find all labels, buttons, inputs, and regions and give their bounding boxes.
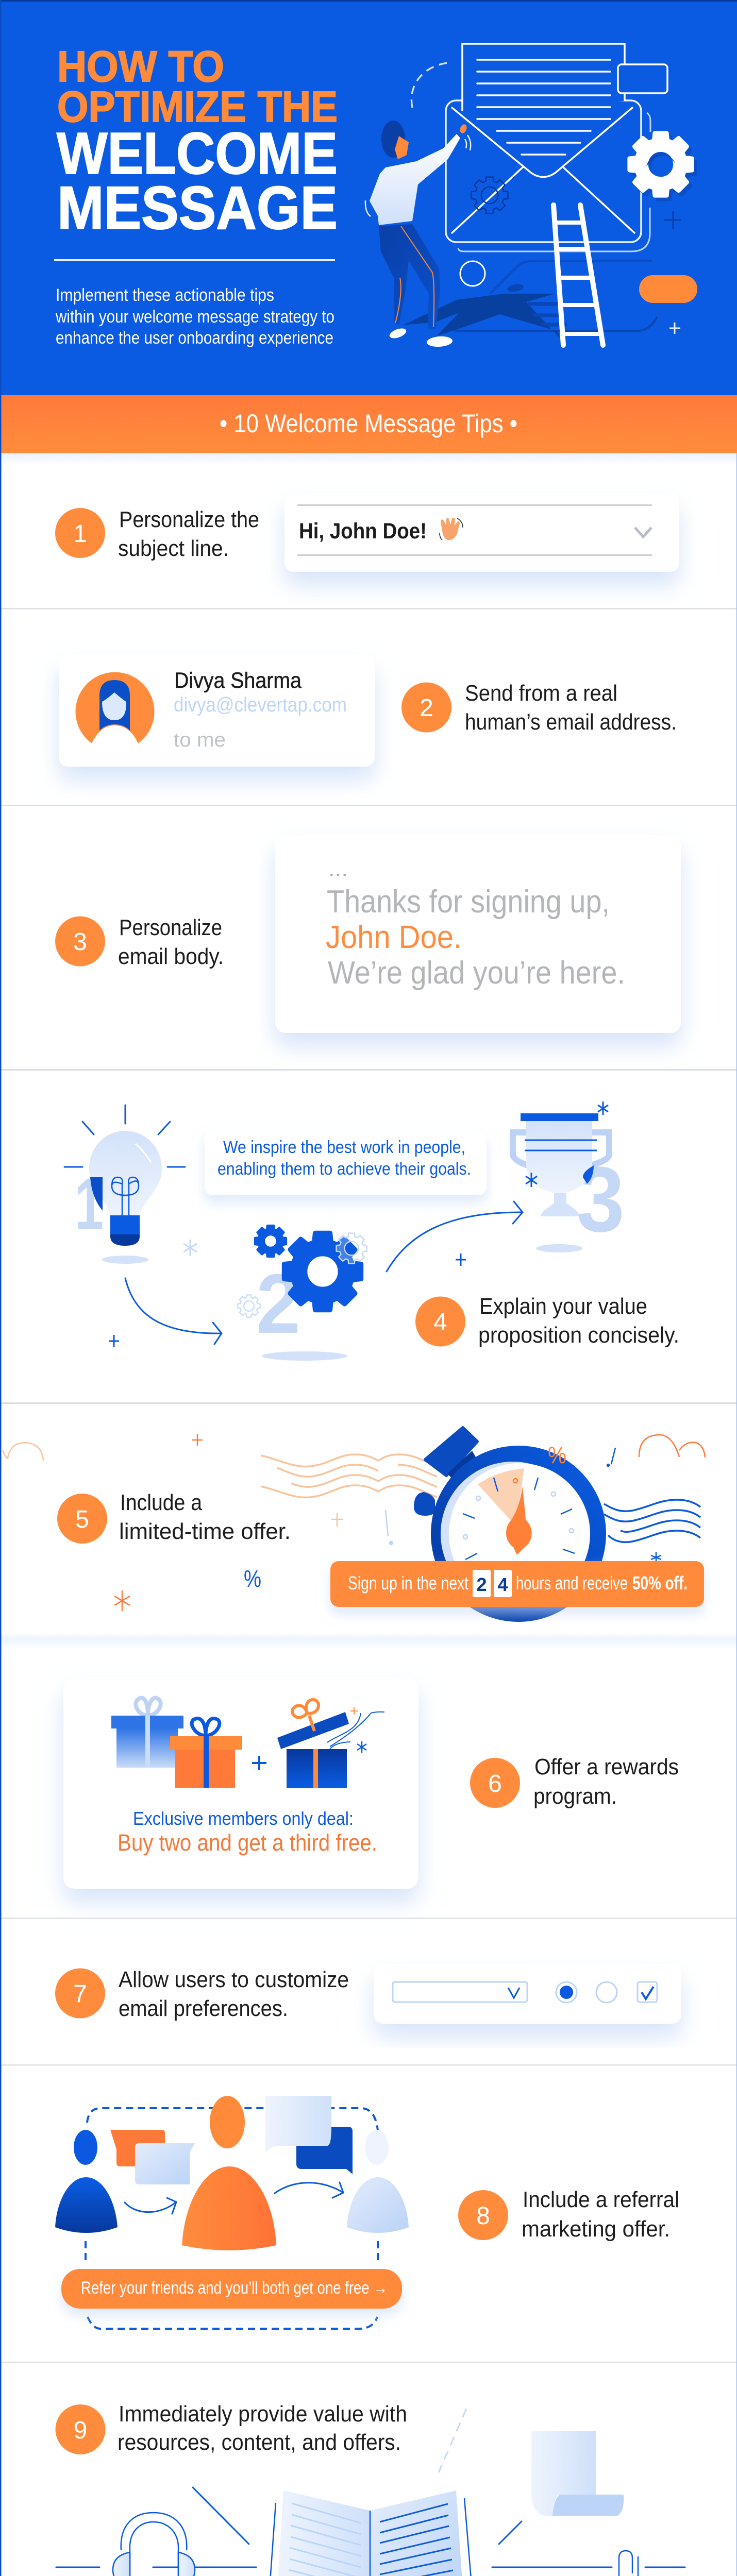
icon: light bulb: 1 — [75, 1163, 104, 1245]
card: sender: Divya Sharma — [174, 668, 301, 693]
arrow: step 1 to step 2 — [125, 1278, 222, 1344]
number 6: 6 — [488, 1770, 502, 1798]
icon: scroll document — [531, 2431, 624, 2516]
card: email body: We’re glad you’re here. — [328, 955, 625, 991]
illustration: phone silhouette and shadow — [403, 261, 657, 338]
dashed loop — [86, 2108, 378, 2329]
card: email body — [275, 835, 681, 1033]
offer bar: hours and receive — [516, 1572, 628, 1594]
card: sender — [59, 654, 375, 767]
number 2 — [401, 682, 451, 733]
panel: tip 5 — [3, 1428, 705, 1622]
subtitle: Implement these actionable tips — [56, 285, 274, 305]
percent signs — [244, 1442, 566, 1592]
panel: tip 4 — [64, 1101, 679, 1361]
card: subject line: Hi, John Doe! — [299, 519, 427, 544]
icon: stopwatch — [414, 1428, 606, 1622]
card: value proposition — [205, 1130, 487, 1195]
tip text — [533, 1754, 679, 1809]
icon: gears: 2 — [256, 1257, 300, 1351]
tip text: Include a referral — [523, 2187, 679, 2212]
number 7 — [55, 1968, 105, 2019]
icon: headphones — [113, 2513, 195, 2576]
subtitle — [55, 285, 334, 348]
tip text: Personalize — [119, 915, 222, 940]
tip text — [118, 2401, 407, 2455]
number 4: 4 — [433, 1309, 447, 1336]
number 8: 8 — [476, 2202, 490, 2230]
tip text: marketing offer. — [522, 2216, 670, 2242]
card: preference controls — [374, 1964, 681, 2024]
tip text: Personalize the — [119, 507, 259, 532]
title — [57, 42, 338, 242]
card: rewards: Buy two and get a third free. — [118, 1829, 377, 1856]
tip text — [118, 915, 224, 969]
number 5 — [57, 1494, 107, 1544]
banner: 10 welcome message tips: • 10 Welcome Message Tips • — [220, 409, 517, 438]
card: rewards — [63, 1677, 418, 1889]
panel: tip 6 — [63, 1677, 679, 1889]
number 7: 7 — [73, 1980, 87, 2008]
card: rewards: Exclusive members only deal: — [133, 1808, 354, 1829]
icon: blue gift — [111, 1698, 183, 1768]
card: sender: to me — [174, 729, 226, 751]
illustration: person — [365, 121, 471, 348]
tip text — [465, 681, 677, 735]
number 9 — [56, 2404, 105, 2454]
icon: light bulb — [64, 1105, 185, 1264]
title: HOW TO — [57, 42, 224, 91]
card: email body: John Doe. — [326, 920, 462, 955]
people and bubbles — [55, 2096, 409, 2250]
waves: orange — [261, 1454, 437, 1498]
icon: chevron — [635, 528, 651, 537]
accents — [3, 1434, 705, 1611]
tip text — [118, 507, 259, 561]
illustration: accents — [460, 211, 697, 334]
percent signs: % — [244, 1565, 261, 1592]
percent signs: % — [548, 1442, 566, 1468]
panel: tip 3 — [55, 835, 681, 1033]
tip text: proposition concisely. — [478, 1323, 679, 1348]
tip text: Send from a real — [465, 681, 617, 706]
countdown digits — [473, 1570, 512, 1597]
tip text: email preferences. — [119, 1996, 288, 2021]
icon: gears — [238, 1226, 366, 1361]
tip text: Allow users to customize — [119, 1967, 349, 1992]
tip text: subject line. — [118, 536, 229, 561]
card: email body: Thanks for signing up, — [327, 884, 610, 920]
panel: tip 1 — [55, 493, 679, 572]
tip text — [478, 1294, 679, 1348]
referral button: Refer your friends and you’ll both get one free → — [81, 2278, 388, 2298]
number 3 — [55, 916, 105, 967]
tip text — [119, 1490, 291, 1544]
number 9: 9 — [74, 2417, 87, 2444]
illustration: dashed arc — [411, 63, 447, 108]
subtitle: enhance the user onboarding experience — [56, 328, 333, 348]
card: value proposition: We inspire the best work in people, — [223, 1138, 465, 1157]
tip text: Immediately provide value with — [119, 2401, 407, 2427]
waves: blue — [604, 1500, 700, 1542]
tip text: human’s email address. — [465, 709, 677, 735]
radio buttons — [556, 1982, 617, 2003]
offer bar: 50% off. — [632, 1572, 688, 1594]
illustration: gears — [472, 133, 695, 213]
checkbox — [638, 1982, 657, 2002]
avatar — [76, 672, 155, 743]
offer bar: Sign up in the next — [348, 1572, 468, 1594]
icon: open gift — [277, 1700, 384, 1788]
card: email body: ... — [328, 859, 348, 880]
arrows — [125, 2182, 343, 2214]
card: sender: divya@clevertap.com — [174, 694, 347, 716]
panel: tip 9 — [56, 2401, 685, 2576]
countdown digits: 2 — [476, 1574, 487, 1595]
icon: waving hand — [440, 518, 463, 540]
icon: book — [268, 2490, 474, 2576]
accents — [109, 1101, 608, 1347]
title: MESSAGE — [57, 174, 338, 242]
number 5: 5 — [75, 1506, 89, 1533]
hero panel — [0, 0, 737, 396]
banner: 10 welcome message tips — [0, 395, 737, 453]
title: WELCOME — [57, 121, 338, 187]
dropdown — [393, 1982, 527, 2002]
rays — [56, 2487, 685, 2576]
panel: tip 8 — [55, 2096, 679, 2329]
countdown digits: 4 — [497, 1574, 508, 1595]
card: subject line — [284, 493, 679, 572]
arrow: step 2 to step 3 — [387, 1201, 523, 1272]
icon: paperclip — [619, 2551, 638, 2576]
tip text: Offer a rewards — [534, 1754, 679, 1780]
tip text: program. — [533, 1784, 617, 1809]
tip text — [119, 1967, 349, 2021]
panel: tip 7 — [55, 1964, 681, 2024]
subtitle: within your welcome message strategy to — [55, 307, 334, 327]
icon: trophy — [513, 1113, 625, 1252]
illustration: ladder — [554, 205, 603, 345]
offer bar — [330, 1561, 704, 1607]
panel: tip 2 — [59, 654, 677, 767]
tip text: Explain your value — [479, 1294, 647, 1319]
tip text — [522, 2187, 679, 2242]
tip text: resources, content, and offers. — [118, 2430, 401, 2455]
title: OPTIMIZE THE — [57, 82, 338, 131]
number 6 — [470, 1758, 520, 1808]
number 1 — [55, 508, 105, 558]
card: value proposition: enabling them to achieve their goals. — [217, 1159, 471, 1179]
number 3: 3 — [73, 928, 87, 956]
illustration: envelope and letter — [446, 44, 667, 251]
icon: trophy: 3 — [576, 1148, 625, 1251]
tip text: email body. — [118, 944, 224, 969]
number 2: 2 — [420, 694, 433, 722]
tip text: limited-time offer. — [119, 1519, 291, 1544]
referral button — [61, 2269, 402, 2309]
number 1: 1 — [73, 520, 87, 548]
plus — [252, 1756, 266, 1770]
tip text: Include a — [120, 1490, 202, 1515]
number 4 — [415, 1296, 465, 1347]
number 8 — [458, 2190, 508, 2240]
icon: orange gift — [170, 1718, 242, 1788]
